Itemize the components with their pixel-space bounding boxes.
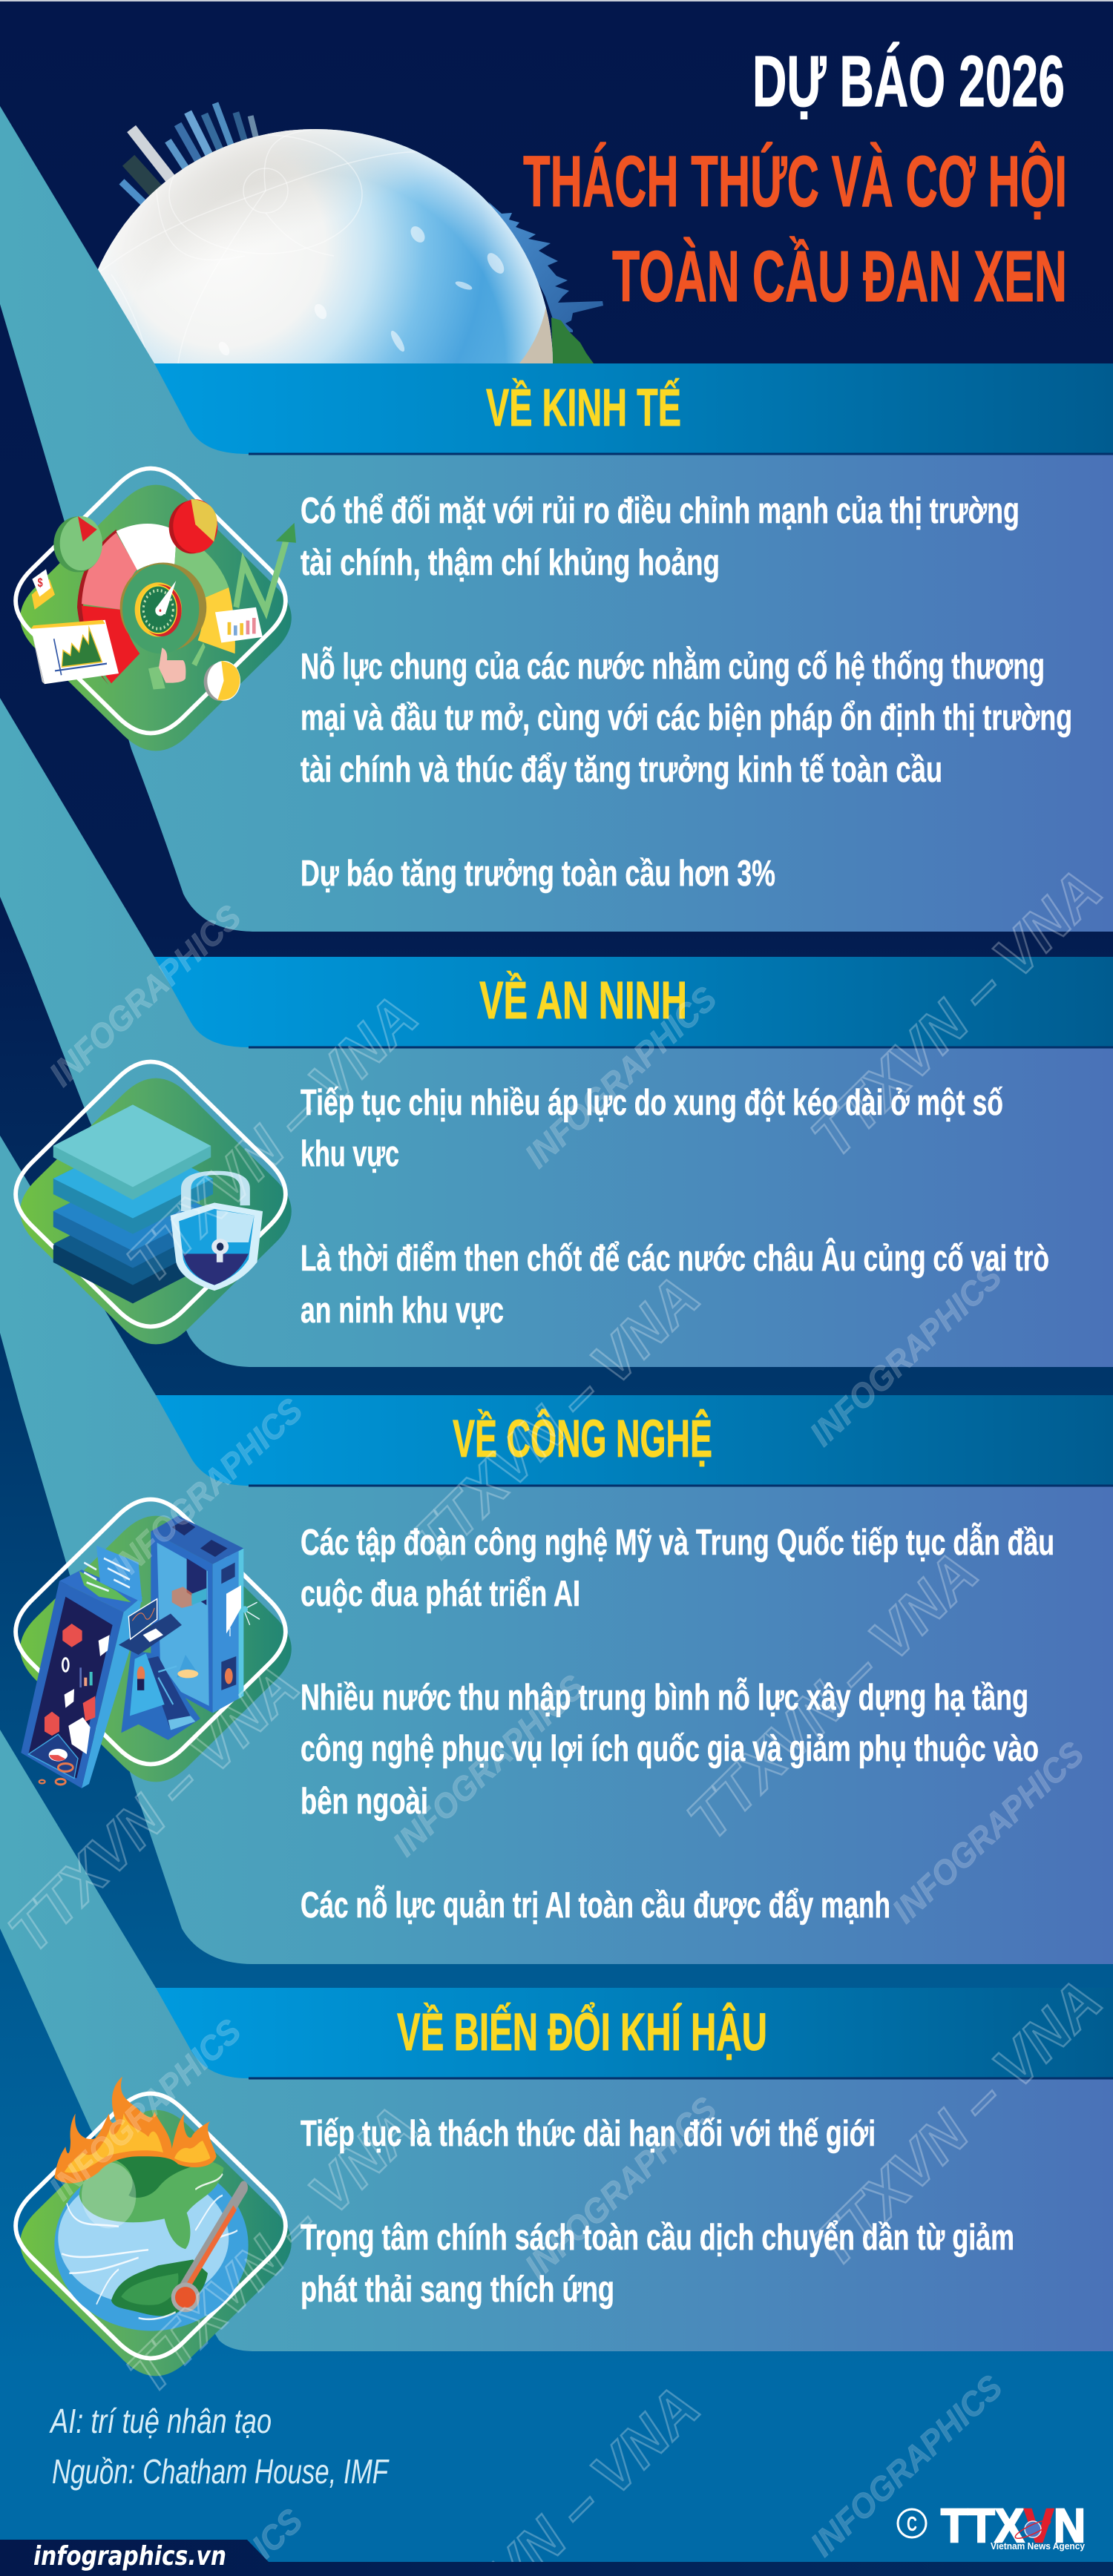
logo: TTXVN Vietnam News Agency: C: [907, 2512, 917, 2535]
text block: technology: bên ngoài: [301, 1782, 428, 1822]
icon: economy gauge and charts: [16, 469, 296, 751]
watermark: INFOGRAPHICS repeated: INFOGRAPHICS: [884, 1734, 1091, 1930]
text block: economy: Dự báo tăng trưởng toàn cầu hơn 3%: [301, 854, 775, 894]
footnote and source: AI: trí tuệ nhân tạo: [49, 2402, 272, 2440]
watermark: TTXVN – VNA repeated: TTXVN – VNA: [674, 1539, 990, 1852]
panel: climate body with wedge: [0, 1730, 1113, 2351]
heading band: security: VỀ AN NINH: [479, 972, 687, 1030]
footer bar with website: [0, 2540, 1113, 2576]
heading band: technology: VỀ CÔNG NGHỆ: [453, 1409, 712, 1469]
panel: technology body with wedge: [0, 1136, 1113, 1964]
watermark: TTXVN – VNA repeated: TTXVN – VNA: [0, 1652, 311, 1965]
text block: security: an ninh khu vực: [301, 1291, 504, 1331]
watermark: TTXVN – VNA repeated: TTXVN – VNA: [798, 1967, 1113, 2280]
text block: economy: [301, 491, 1072, 894]
text block: climate: Tiếp tục là thách thức dài hạn đối với thế giới: [301, 2114, 876, 2154]
watermark: INFOGRAPHICS repeated: INFOGRAPHICS: [42, 2012, 249, 2207]
icon: climate burning globe and thermometer: [16, 2077, 292, 2376]
panel: security body with wedge: [0, 698, 1113, 1367]
watermark: INFOGRAPHICS repeated: INFOGRAPHICS: [103, 1391, 310, 1587]
text block: security: khu vực: [301, 1134, 399, 1174]
watermark: TTXVN – VNA repeated: TTXVN – VNA: [396, 1263, 712, 1576]
watermark: TTXVN – VNA repeated: [0, 857, 1113, 2576]
icon: technology isometric AI letters: [16, 1500, 292, 1788]
watermark: INFOGRAPHICS repeated: INFOGRAPHICS: [385, 1667, 592, 1863]
heading band: economy: VỀ KINH TẾ: [486, 379, 681, 438]
watermark: TTXVN – VNA repeated: TTXVN – VNA: [798, 857, 1113, 1170]
footer bar with website: infographics.vn: [33, 2541, 226, 2572]
logo: TTXVN Vietnam News Agency: Vietnam News Agency: [991, 2540, 1086, 2552]
heading band: climate: [156, 1988, 1113, 2078]
watermark: INFOGRAPHICS repeated: INFOGRAPHICS: [42, 897, 249, 1093]
panel: economy body with wedge: [0, 106, 1113, 932]
heading band: economy: [154, 363, 1113, 454]
text block: technology: Các nỗ lực quản trị AI toàn cầu được đẩy mạnh: [301, 1885, 890, 1926]
watermark: INFOGRAPHICS repeated: INFOGRAPHICS: [517, 979, 724, 1175]
text block: climate: phát thải sang thích ứng: [301, 2270, 614, 2310]
text block: technology: cuộc đua phát triển AI: [301, 1574, 580, 1614]
watermark: INFOGRAPHICS repeated: INFOGRAPHICS: [803, 2368, 1010, 2563]
text block: security: [301, 1083, 1049, 1331]
globe with city skyline: [67, 102, 603, 363]
icon: security layers and padlock: [16, 1062, 292, 1344]
watermark: INFOGRAPHICS repeated: [42, 897, 1091, 2576]
watermark: INFOGRAPHICS repeated: INFOGRAPHICS: [517, 2089, 724, 2285]
heading band: technology: [156, 1395, 1113, 1486]
heading band: climate: VỀ BIẾN ĐỔI KHÍ HẬU: [397, 2003, 767, 2062]
icon: economy gauge and charts: $: [38, 576, 43, 590]
title: [523, 41, 1067, 317]
logo: TTXVN Vietnam News Agency: TTXVN: [941, 2499, 1086, 2552]
text block: climate: [301, 2114, 1014, 2310]
text block: technology: [301, 1523, 1054, 1926]
footnote and source: Nguồn: Chatham House, IMF: [52, 2452, 390, 2491]
watermark: TTXVN – VNA repeated: TTXVN – VNA: [114, 2093, 430, 2406]
watermark: TTXVN – VNA repeated: TTXVN – VNA: [114, 983, 430, 1296]
text block: economy: tài chính, thậm chí khủng hoảng: [301, 543, 720, 583]
watermark: INFOGRAPHICS repeated: INFOGRAPHICS: [802, 1257, 1009, 1453]
heading band: security: [154, 957, 1113, 1047]
footnote and source: [49, 2402, 390, 2491]
